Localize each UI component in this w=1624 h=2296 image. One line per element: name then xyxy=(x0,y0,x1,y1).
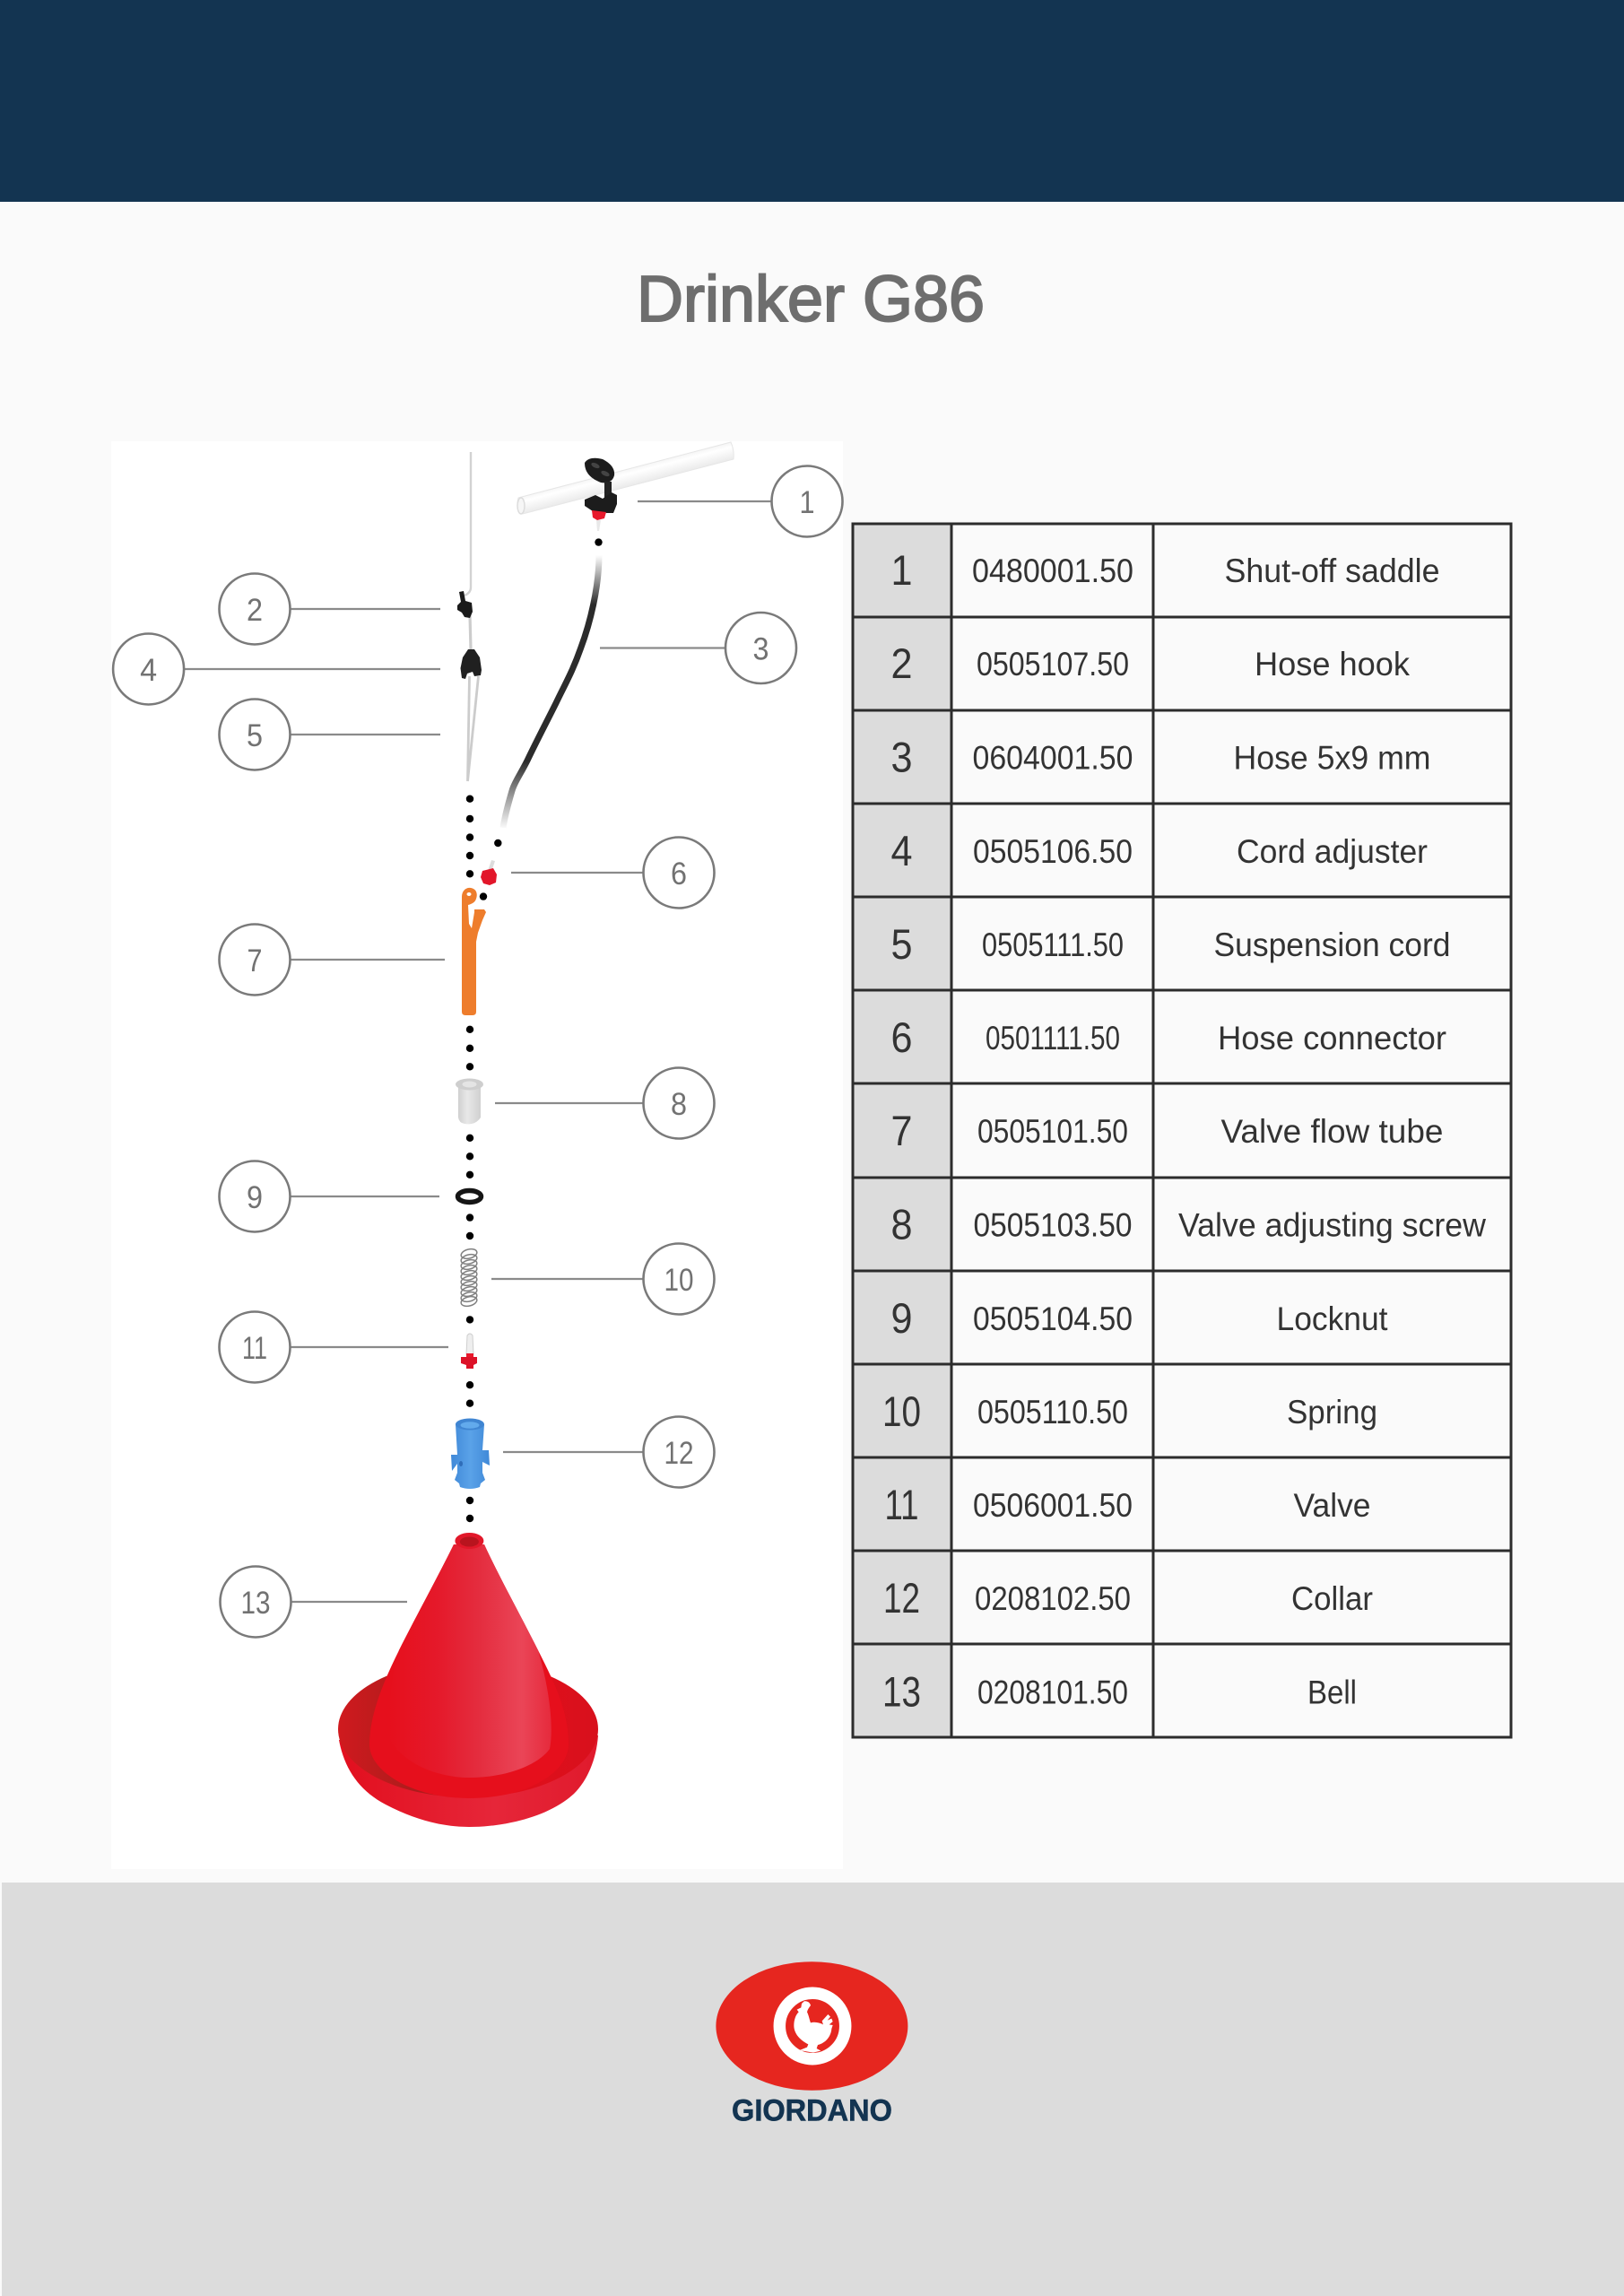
callout 11: 11 xyxy=(242,1331,267,1366)
row 3: Hose 5x9 mm xyxy=(1234,739,1431,777)
row 4: 0505106.50 xyxy=(973,833,1133,870)
callout 5: 5 xyxy=(247,718,263,753)
row 6: Hose connector xyxy=(1218,1020,1446,1057)
callout 9 xyxy=(219,1161,439,1232)
part 4: cord adjuster xyxy=(461,649,482,679)
row 12: 0208102.50 xyxy=(975,1580,1131,1617)
callout 1 xyxy=(638,466,843,536)
row 9: 0505104.50 xyxy=(973,1300,1133,1337)
callout 8: 8 xyxy=(671,1087,687,1122)
row 7: 7 xyxy=(891,1107,913,1154)
row 5 xyxy=(891,920,1451,968)
row 11 xyxy=(884,1481,1370,1528)
callout 12: 12 xyxy=(664,1436,694,1471)
row 2: 2 xyxy=(891,639,913,687)
callout 2: 2 xyxy=(247,593,263,628)
callout 3 xyxy=(600,613,796,683)
part 9: locknut xyxy=(457,1191,481,1202)
row 11: 0506001.50 xyxy=(973,1487,1133,1524)
row 13 xyxy=(882,1668,1357,1715)
part 11: valve xyxy=(461,1334,477,1369)
row 2 xyxy=(891,639,1410,687)
row 1: 1 xyxy=(891,546,913,594)
row 5: 5 xyxy=(891,920,913,968)
row 8 xyxy=(891,1200,1486,1248)
row 10 xyxy=(882,1387,1377,1435)
callout 8 xyxy=(495,1067,714,1139)
row 13: 13 xyxy=(882,1668,921,1715)
row 11: 11 xyxy=(884,1481,918,1528)
part 5: suspension cord xyxy=(465,452,479,781)
part 8: valve adjusting screw xyxy=(456,1078,483,1124)
callout 11 xyxy=(219,1311,448,1383)
row 12: Collar xyxy=(1291,1580,1373,1617)
title: Drinker G86 xyxy=(637,264,985,335)
row 5: 0505111.50 xyxy=(982,926,1124,963)
row 9 xyxy=(891,1294,1388,1342)
row 3: 3 xyxy=(891,734,913,780)
row 9: Locknut xyxy=(1277,1300,1388,1337)
row 6 xyxy=(891,1013,1446,1061)
row 4: Cord adjuster xyxy=(1237,833,1428,870)
row 7: 0505101.50 xyxy=(977,1113,1128,1150)
callout 1: 1 xyxy=(800,485,814,520)
part 7: valve flow tube xyxy=(462,888,486,1015)
row 6: 0501111.50 xyxy=(986,1020,1120,1057)
row 12: 12 xyxy=(883,1574,920,1622)
row 12 xyxy=(883,1574,1373,1622)
icon: rooster xyxy=(794,2001,833,2053)
callout 4: 4 xyxy=(140,653,157,688)
part 1: shut-off saddle on pipe xyxy=(517,442,734,531)
row 5: Suspension cord xyxy=(1214,926,1451,963)
callout 6 xyxy=(511,838,714,908)
callout 13 xyxy=(221,1566,407,1638)
callout 2 xyxy=(219,574,440,644)
logo wordmark: GIORDANO xyxy=(732,2093,892,2127)
footer band xyxy=(2,1883,1624,2296)
panel: exploded diagram xyxy=(111,441,843,1869)
callout 4 xyxy=(113,633,440,705)
row 8: Valve adjusting screw xyxy=(1178,1207,1486,1243)
part 13: bell xyxy=(338,1533,598,1827)
part 12: collar xyxy=(451,1419,490,1489)
parts table xyxy=(853,524,1511,1737)
row 2: 0505107.50 xyxy=(977,646,1129,683)
logo: Giordano xyxy=(716,1961,908,2127)
callout 3: 3 xyxy=(753,631,769,667)
row 8: 8 xyxy=(891,1200,913,1248)
part 3: hose xyxy=(503,555,599,828)
header band xyxy=(0,0,1624,202)
callout 13: 13 xyxy=(240,1586,271,1621)
callout 5 xyxy=(219,700,440,770)
row 6: 6 xyxy=(891,1013,913,1061)
row 10: Spring xyxy=(1287,1394,1377,1431)
row 1 xyxy=(891,546,1440,594)
callout 9: 9 xyxy=(247,1180,263,1215)
callout 12 xyxy=(503,1417,714,1487)
row 3 xyxy=(891,734,1431,780)
assembly dot connectors xyxy=(466,538,603,1522)
row 10: 10 xyxy=(882,1387,921,1435)
row 7: Valve flow tube xyxy=(1221,1113,1444,1150)
callout 10 xyxy=(491,1243,714,1315)
row 10: 0505110.50 xyxy=(977,1394,1128,1431)
row 2: Hose hook xyxy=(1255,646,1410,683)
row 13: 0208101.50 xyxy=(977,1674,1128,1711)
callout 10: 10 xyxy=(664,1263,694,1298)
row 13: Bell xyxy=(1307,1674,1357,1711)
row 9: 9 xyxy=(891,1294,913,1342)
row 1: Shut-off saddle xyxy=(1225,552,1440,589)
row 4 xyxy=(891,827,1428,874)
part 6: hose connector xyxy=(481,860,497,885)
row 3: 0604001.50 xyxy=(972,739,1133,777)
callout 6: 6 xyxy=(671,857,687,891)
part 10: spring xyxy=(460,1248,478,1308)
row 7 xyxy=(891,1107,1444,1154)
row 4: 4 xyxy=(891,827,913,874)
callout 7: 7 xyxy=(248,944,262,978)
part 2: hose hook xyxy=(457,591,473,618)
callout 7 xyxy=(219,924,445,996)
row 11: Valve xyxy=(1293,1487,1370,1524)
row 8: 0505103.50 xyxy=(974,1207,1132,1243)
row 1: 0480001.50 xyxy=(972,552,1133,589)
